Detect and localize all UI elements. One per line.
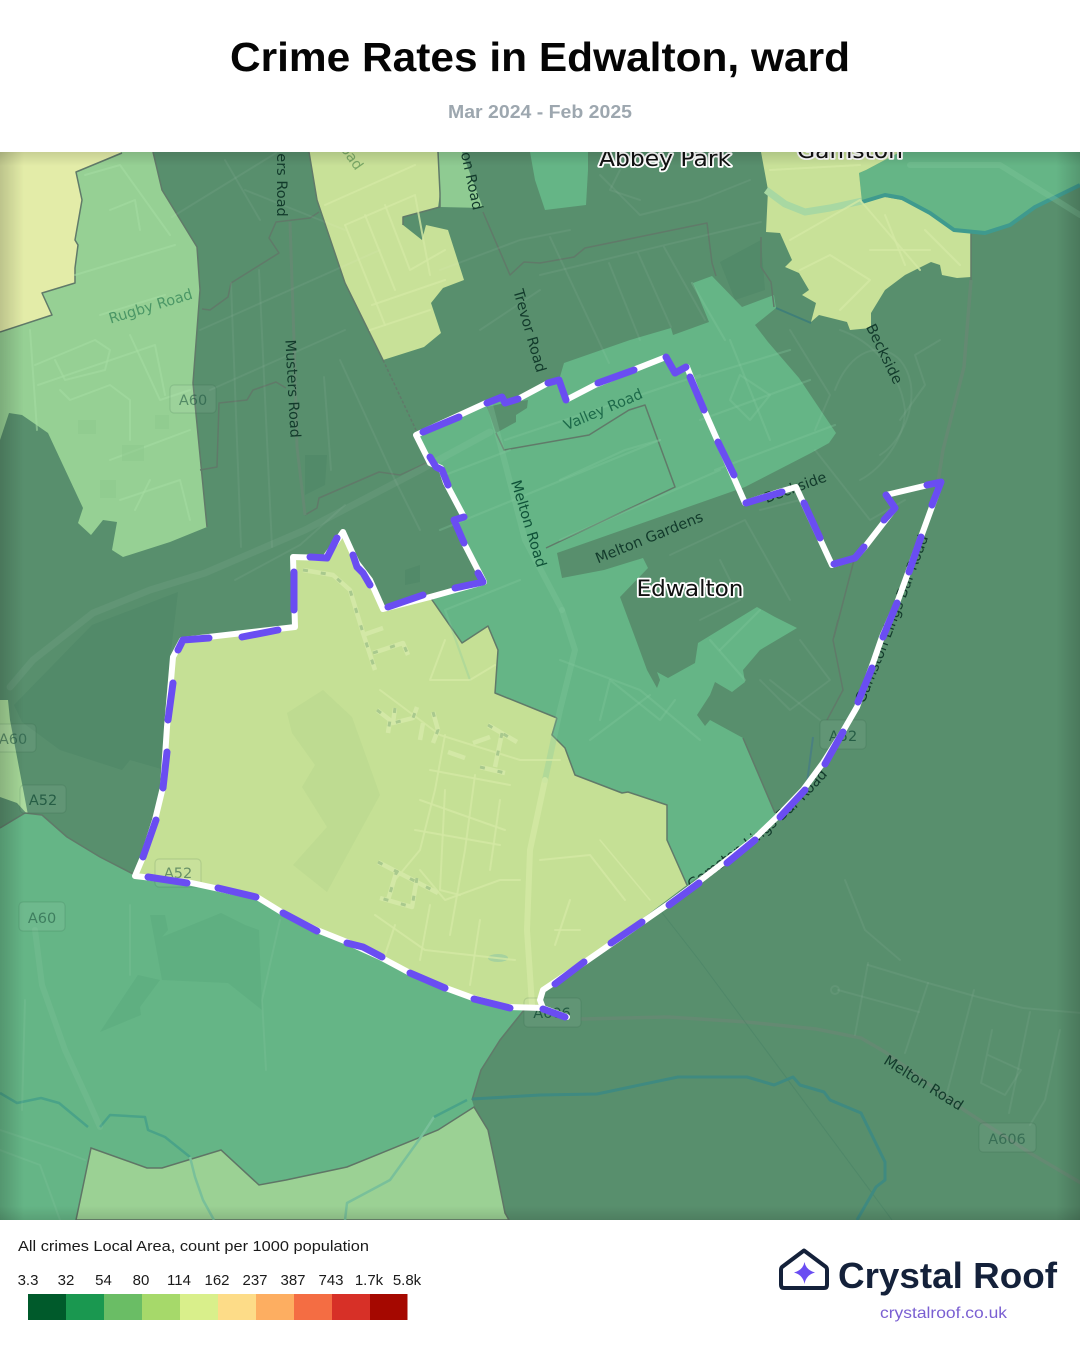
map region: dark notch near Valley Road <box>487 400 528 433</box>
place names: Abbey Park <box>599 147 731 172</box>
map region: north light green sliver <box>438 152 483 208</box>
map edge shading <box>0 152 19 1220</box>
road labels: Trevor Road <box>509 287 548 374</box>
medium area streets <box>440 165 1080 780</box>
area boundary lines <box>0 152 971 1100</box>
map region: Gamston medium <box>859 152 1080 233</box>
street network <box>8 154 1070 1128</box>
map region: south light green <box>76 1107 509 1220</box>
map region: Gamston yellow <box>761 152 971 330</box>
road labels: oad <box>337 142 366 173</box>
road labels: Beckside <box>762 470 829 507</box>
south-west streets <box>0 1130 85 1160</box>
road labels: Valley Road <box>562 386 645 434</box>
map region: west edge light strip <box>0 700 28 815</box>
map region: north medium patch <box>530 152 588 210</box>
thin power line <box>660 910 892 1220</box>
map region: golf course patch <box>287 690 380 892</box>
legend ticks: 5.8k <box>393 1272 422 1289</box>
legend ticks: 1.7k <box>355 1272 384 1289</box>
road labels: Gamston Lings Bar Road <box>688 770 827 885</box>
place names <box>599 139 903 602</box>
map region: Rugby Road light green <box>0 152 207 557</box>
legend title: All crimes Local Area, count per 1000 population <box>18 1238 369 1255</box>
map region: yellow north-west <box>0 152 122 332</box>
map region: south-west medium <box>0 813 530 1220</box>
title: Crime Rates in Edwalton, ward <box>230 34 850 80</box>
legend ticks: 114 <box>167 1272 191 1289</box>
road labels: Musters Road <box>281 339 303 438</box>
place names: Gamston <box>797 139 903 164</box>
road shields <box>0 385 1036 1152</box>
Rugby area streets <box>30 165 190 520</box>
place names: Edwalton <box>636 577 744 602</box>
big road <box>8 463 432 690</box>
subtle darker land patches <box>14 240 765 770</box>
road shields: A52 <box>29 793 57 809</box>
road shields: A52 <box>164 866 192 882</box>
road labels: ers Road <box>273 153 289 217</box>
legend ticks: 237 <box>242 1272 268 1289</box>
map region: Edwalton centre medium <box>416 276 836 885</box>
Rugby area darker blocks <box>122 446 144 456</box>
legend ticks: 80 <box>133 1272 149 1289</box>
map region: pond <box>488 954 508 962</box>
subtitle: date range: Mar 2024 - Feb 2025 <box>448 101 632 122</box>
legend ticks: 162 <box>204 1272 230 1289</box>
legend ticks <box>18 1272 422 1289</box>
road labels: on Road <box>457 151 485 212</box>
road labels: Melton Road <box>507 478 549 569</box>
rivers <box>0 185 1080 1220</box>
road shields: A52 <box>829 729 857 745</box>
road shields: A606 <box>533 1006 571 1022</box>
brand name: Crystal Roof <box>838 1255 1058 1296</box>
road labels: Beckside <box>862 322 905 387</box>
patchy new-build streets in ward <box>303 570 517 907</box>
grey trunk roads <box>290 222 1080 1183</box>
road labels: Gamston Lings Bar Road <box>856 534 928 702</box>
road labels: Melton Gardens <box>593 509 706 567</box>
map region: ward yellow south <box>135 532 687 1008</box>
yellow area streets <box>325 165 960 1005</box>
brand logo <box>781 1250 1058 1322</box>
ward boundary purple dashes <box>143 357 941 1017</box>
Beckside loops <box>840 330 905 480</box>
ward boundary <box>135 357 941 1017</box>
legend ticks: 743 <box>318 1272 344 1289</box>
road shields: A60 <box>28 911 56 927</box>
road shields: A606 <box>988 1132 1026 1148</box>
road labels: Melton Road <box>881 1053 966 1114</box>
road labels <box>109 152 964 1110</box>
legend colour scale <box>28 1294 408 1320</box>
legend <box>18 1238 422 1320</box>
road shields: A60 <box>179 393 207 409</box>
legend ticks: 54 <box>95 1272 112 1289</box>
legend ticks: 387 <box>280 1272 306 1289</box>
road labels: Rugby Road <box>107 287 195 327</box>
south-east streets <box>855 963 868 1035</box>
map region: north yellow strip <box>309 152 464 360</box>
icon: house with star <box>781 1250 827 1288</box>
legend ticks: 3.3 <box>18 1272 38 1289</box>
brand url: crystalroof.co.uk <box>880 1305 1008 1322</box>
legend ticks: 32 <box>58 1272 74 1289</box>
